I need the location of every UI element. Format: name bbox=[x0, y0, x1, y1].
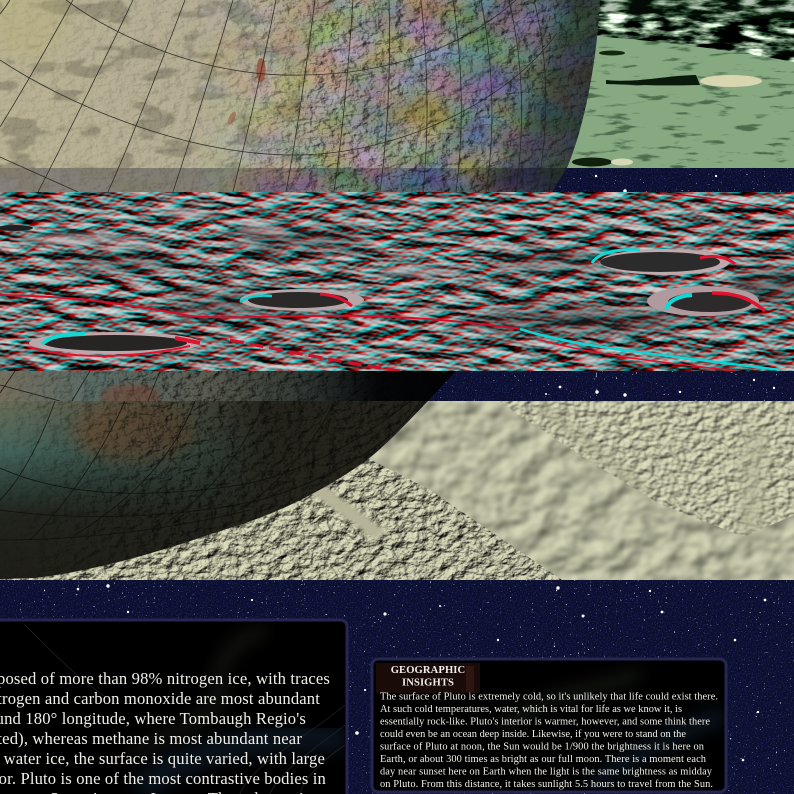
insights body text: essentially rock-like. Pluto's interior is warmer, however, and some think there bbox=[380, 716, 710, 728]
panel: geographic insights box bbox=[372, 659, 726, 792]
insights body text: At such cold temperatures, water, which is vital for life as we know it, is bbox=[380, 704, 682, 715]
strip rock relief bbox=[0, 371, 366, 401]
smooth central terrain bbox=[368, 401, 794, 580]
left body text bbox=[0, 669, 330, 794]
left body text: trogen and carbon monoxide are most abundant bbox=[0, 689, 320, 708]
insights body text: The surface of Pluto is extremely cold, so it's unlikely that life could exist there. bbox=[380, 692, 718, 702]
insights body text: could even be an ocean deep inside. Likewise, if you were to stand on the bbox=[380, 729, 686, 740]
rock relief layer bbox=[0, 0, 610, 192]
bumpy upper right terrain bbox=[501, 401, 794, 537]
swirl decoration bbox=[376, 663, 725, 790]
rock shadows bbox=[572, 50, 762, 166]
left body text: und 180° longitude, where Tombaugh Regio's bbox=[0, 709, 306, 728]
craters bbox=[0, 193, 794, 371]
insights body text: on Pluto. From this distance, it takes sunlight 5.5 hours to travel from the Sun. bbox=[380, 779, 713, 790]
panel: lower globe strip over stars bbox=[0, 371, 456, 401]
left body text: ted), whereas methane is most abundant near bbox=[0, 729, 302, 748]
heading: GEOGRAPHIC bbox=[391, 665, 465, 676]
swirl decoration bbox=[25, 625, 345, 794]
dark mottled upper terrain bbox=[590, 0, 794, 64]
insights body text: day near sunset here on Earth when the light is the same brightness as midday bbox=[380, 766, 713, 778]
panel: beige terrain bbox=[0, 395, 794, 585]
lower globe strip grid bbox=[0, 371, 160, 401]
panel: anaglyph crater band bbox=[0, 184, 794, 379]
surface stains bbox=[0, 0, 496, 130]
lower globe rock relief bbox=[0, 401, 430, 581]
panel: left text box bbox=[0, 620, 347, 794]
panel: darkened lower globe bbox=[0, 401, 430, 581]
panel: upper globe with textured surface bbox=[0, 0, 610, 192]
colour variation layer bbox=[200, 0, 610, 192]
left body text: posed of more than 98% nitrogen ice, with traces bbox=[0, 669, 330, 688]
left body text: or. Pluto is one of the most contrastive bodies in bbox=[0, 769, 327, 788]
insights body text: surface of Pluto at noon, the Sun would be 1/900 the brightness it is here on bbox=[380, 742, 705, 752]
lower globe grid bbox=[0, 401, 420, 540]
latitude and longitude grid bbox=[0, 0, 557, 192]
insights body text bbox=[380, 692, 718, 790]
heading bbox=[391, 665, 465, 688]
panel: green terrain behind globe bbox=[560, 0, 794, 168]
insights body text: Earth, or about 300 times as bright as our full moon. There is a moment each bbox=[380, 754, 707, 765]
heading: INSIGHTS bbox=[402, 678, 454, 688]
left body text: water ice, the surface is quite varied, with large bbox=[4, 749, 325, 768]
